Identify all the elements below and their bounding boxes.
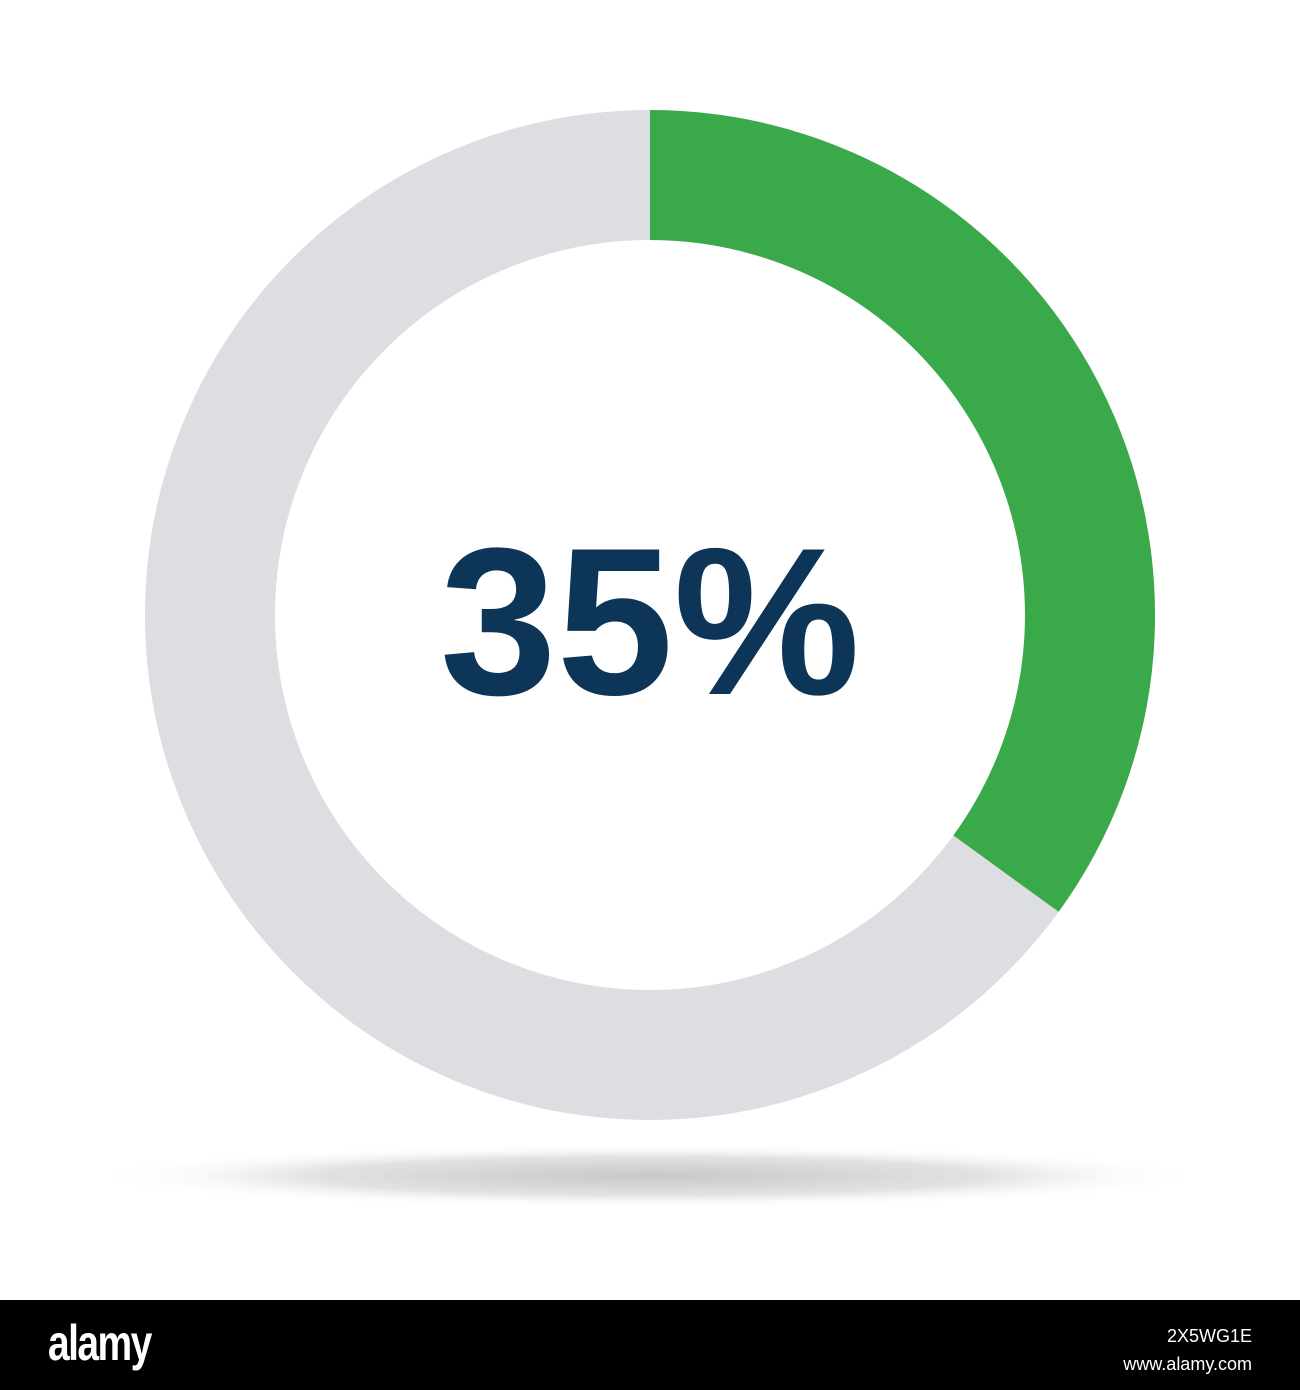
image id: www.alamy.com [1123,1354,1252,1374]
footer bar [0,1300,1300,1390]
percentage label: 35% [440,504,860,739]
image id [1123,1326,1252,1374]
image id: 2X5WG1E [1167,1326,1252,1346]
green segment 35% [650,110,1155,912]
shadow [90,1144,1210,1208]
logo: alamy [48,1315,151,1371]
ring background [210,175,1090,1055]
